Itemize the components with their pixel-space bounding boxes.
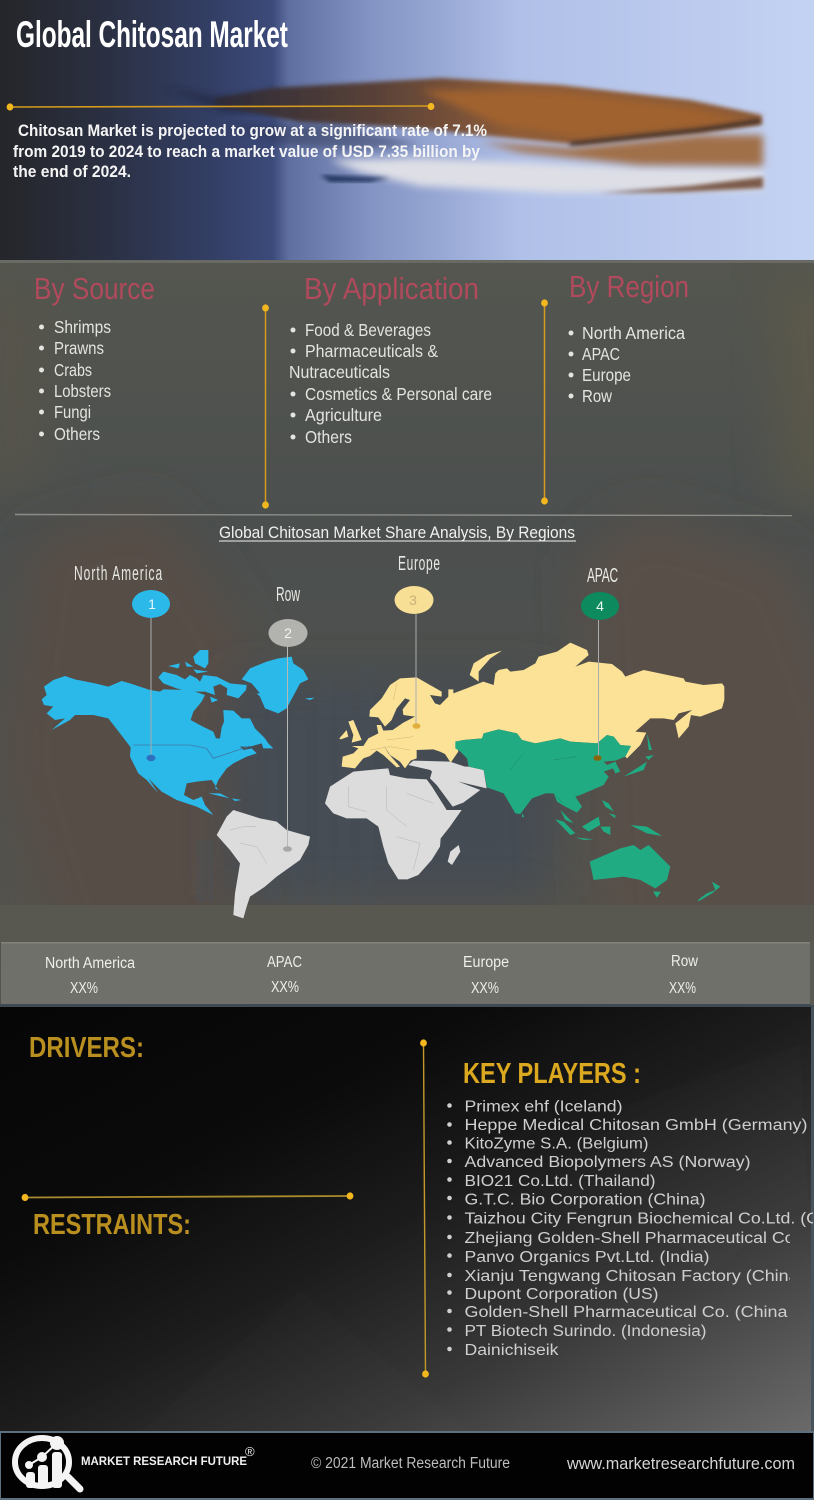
list: regions: North America — [582, 323, 685, 343]
panel: regional share table: APAC — [267, 954, 302, 971]
panel: segmentation and map background — [0, 260, 814, 1008]
list: sources: Shrimps — [54, 317, 111, 337]
panel: regional share table: XX% — [271, 979, 299, 996]
panel: regional share table: XX% — [70, 980, 98, 997]
panel: regional share table: Row — [671, 953, 699, 970]
list: key players: Panvo Organics Pvt.Ltd. (India) — [464, 1249, 710, 1266]
icon: Market Research Future logo — [15, 1436, 80, 1489]
list: regions — [568, 323, 685, 406]
panel: regional share table: North America — [45, 955, 135, 972]
panel: footer — [0, 1431, 814, 1500]
callout: Row — [268, 584, 308, 852]
callout: Europe — [394, 553, 440, 729]
callout: Row: 2 — [284, 625, 292, 641]
text: website: www.marketresearchfuture.com — [566, 1455, 795, 1473]
divider: horizontal gold line — [22, 1192, 353, 1201]
text block: market summary: the end of 2024. — [13, 163, 131, 181]
text: brand name: ® — [245, 1444, 255, 1459]
divider: vertical gold line 3 — [420, 1039, 429, 1378]
list: applications: Pharmaceuticals & — [305, 341, 438, 361]
list: key players: KitoZyme S.A. (Belgium) — [464, 1136, 648, 1152]
heading: By Application: By Application — [304, 271, 479, 306]
panel: regional share table: Europe — [463, 954, 509, 971]
heading: restraints: RESTRAINTS: — [33, 1209, 191, 1241]
list: applications: Nutraceuticals — [289, 362, 390, 382]
map region: Asia Pacific — [455, 729, 720, 902]
text: brand name — [81, 1444, 255, 1468]
list: sources: Fungi — [54, 402, 91, 422]
callout: Row: Row — [276, 584, 300, 606]
list: key players: G.T.C. Bio Corporation (China) — [464, 1192, 706, 1208]
divider: hero gold line — [7, 103, 434, 111]
text: copyright: © 2021 Market Research Future — [311, 1455, 510, 1472]
list: sources: Lobsters — [54, 381, 111, 401]
text: brand name: MARKET RESEARCH FUTURE — [81, 1454, 247, 1468]
list: regions: Europe — [582, 365, 631, 385]
image: shrimp — [165, 78, 763, 193]
map region: Africa and Middle East — [325, 761, 487, 879]
list: regions: APAC — [582, 344, 620, 364]
list: key players: Zhejiang Golden-Shell Pharmaceutical Co — [464, 1230, 794, 1247]
list: key players: Xianju Tengwang Chitosan Factory (China) — [464, 1268, 804, 1285]
list: key players: Golden-Shell Pharmaceutical Co. (China — [464, 1304, 788, 1321]
divider: vertical gold line 2 — [541, 299, 548, 505]
list: applications: Agriculture — [305, 405, 382, 425]
list: applications: Others — [305, 427, 352, 447]
list: sources — [39, 317, 111, 444]
callout: North America: North America — [74, 563, 163, 585]
map: world regions — [42, 643, 724, 918]
heading: By Source: By Source — [34, 271, 155, 306]
panel: hero banner — [0, 0, 814, 260]
list: sources: Crabs — [54, 360, 92, 380]
list: sources: Others — [54, 424, 100, 444]
list: key players: Heppe Medical Chitosan GmbH (Germany) — [464, 1117, 808, 1134]
list: key players: Advanced Biopolymers AS (Norway) — [464, 1154, 750, 1171]
panel: regional share table — [0, 942, 814, 1007]
heading: drivers: DRIVERS: — [29, 1032, 144, 1064]
title: Global Chitosan Market — [16, 14, 288, 55]
list: sources: Prawns — [54, 338, 104, 358]
list: key players: Primex ehf (Iceland) — [464, 1098, 622, 1116]
text block: market summary: Chitosan Market is projected to grow at a significant rate of 7.1% — [18, 122, 487, 140]
callout: North America: 1 — [148, 596, 156, 612]
callout: APAC: 4 — [596, 598, 604, 614]
list: regions: Row — [582, 386, 612, 406]
text block: market summary: from 2019 to 2024 to reach a market value of USD 7.35 billion by — [13, 143, 481, 161]
list: applications: Food & Beverages — [305, 320, 431, 340]
map region: North America — [42, 650, 315, 815]
text block: market summary — [13, 122, 487, 181]
callout: APAC — [581, 565, 619, 761]
divider: vertical gold line 1 — [262, 304, 269, 509]
callout: APAC: APAC — [587, 565, 618, 587]
list: key players: PT Biotech Surindo. (Indonesia) — [464, 1323, 706, 1340]
list: applications — [289, 320, 492, 447]
panel: regional share table: XX% — [669, 980, 696, 997]
list: key players: Dupont Corporation (US) — [464, 1286, 658, 1303]
panel: regional share table: XX% — [471, 980, 499, 997]
heading: market share analysis: Global Chitosan Market Share Analysis, By Regions — [219, 523, 575, 542]
list: key players: BIO21 Co.Ltd. (Thailand) — [464, 1173, 656, 1190]
callout: Europe: Europe — [398, 553, 440, 575]
heading: By Region: By Region — [569, 269, 689, 304]
panel: drivers, restraints and key players — [0, 1007, 814, 1432]
callout: North America — [74, 563, 170, 761]
list: key players — [447, 1098, 814, 1359]
heading: key players: KEY PLAYERS : — [463, 1058, 641, 1090]
list: applications: Cosmetics & Personal care — [305, 384, 492, 404]
callout: Europe: 3 — [409, 592, 417, 608]
list: key players: Taizhou City Fengrun Biochemical Co.Ltd. (China) — [464, 1210, 814, 1228]
map region: Europe and Russia — [339, 643, 724, 768]
map region: South America — [217, 810, 310, 918]
list: key players: Dainichiseik — [464, 1342, 559, 1359]
